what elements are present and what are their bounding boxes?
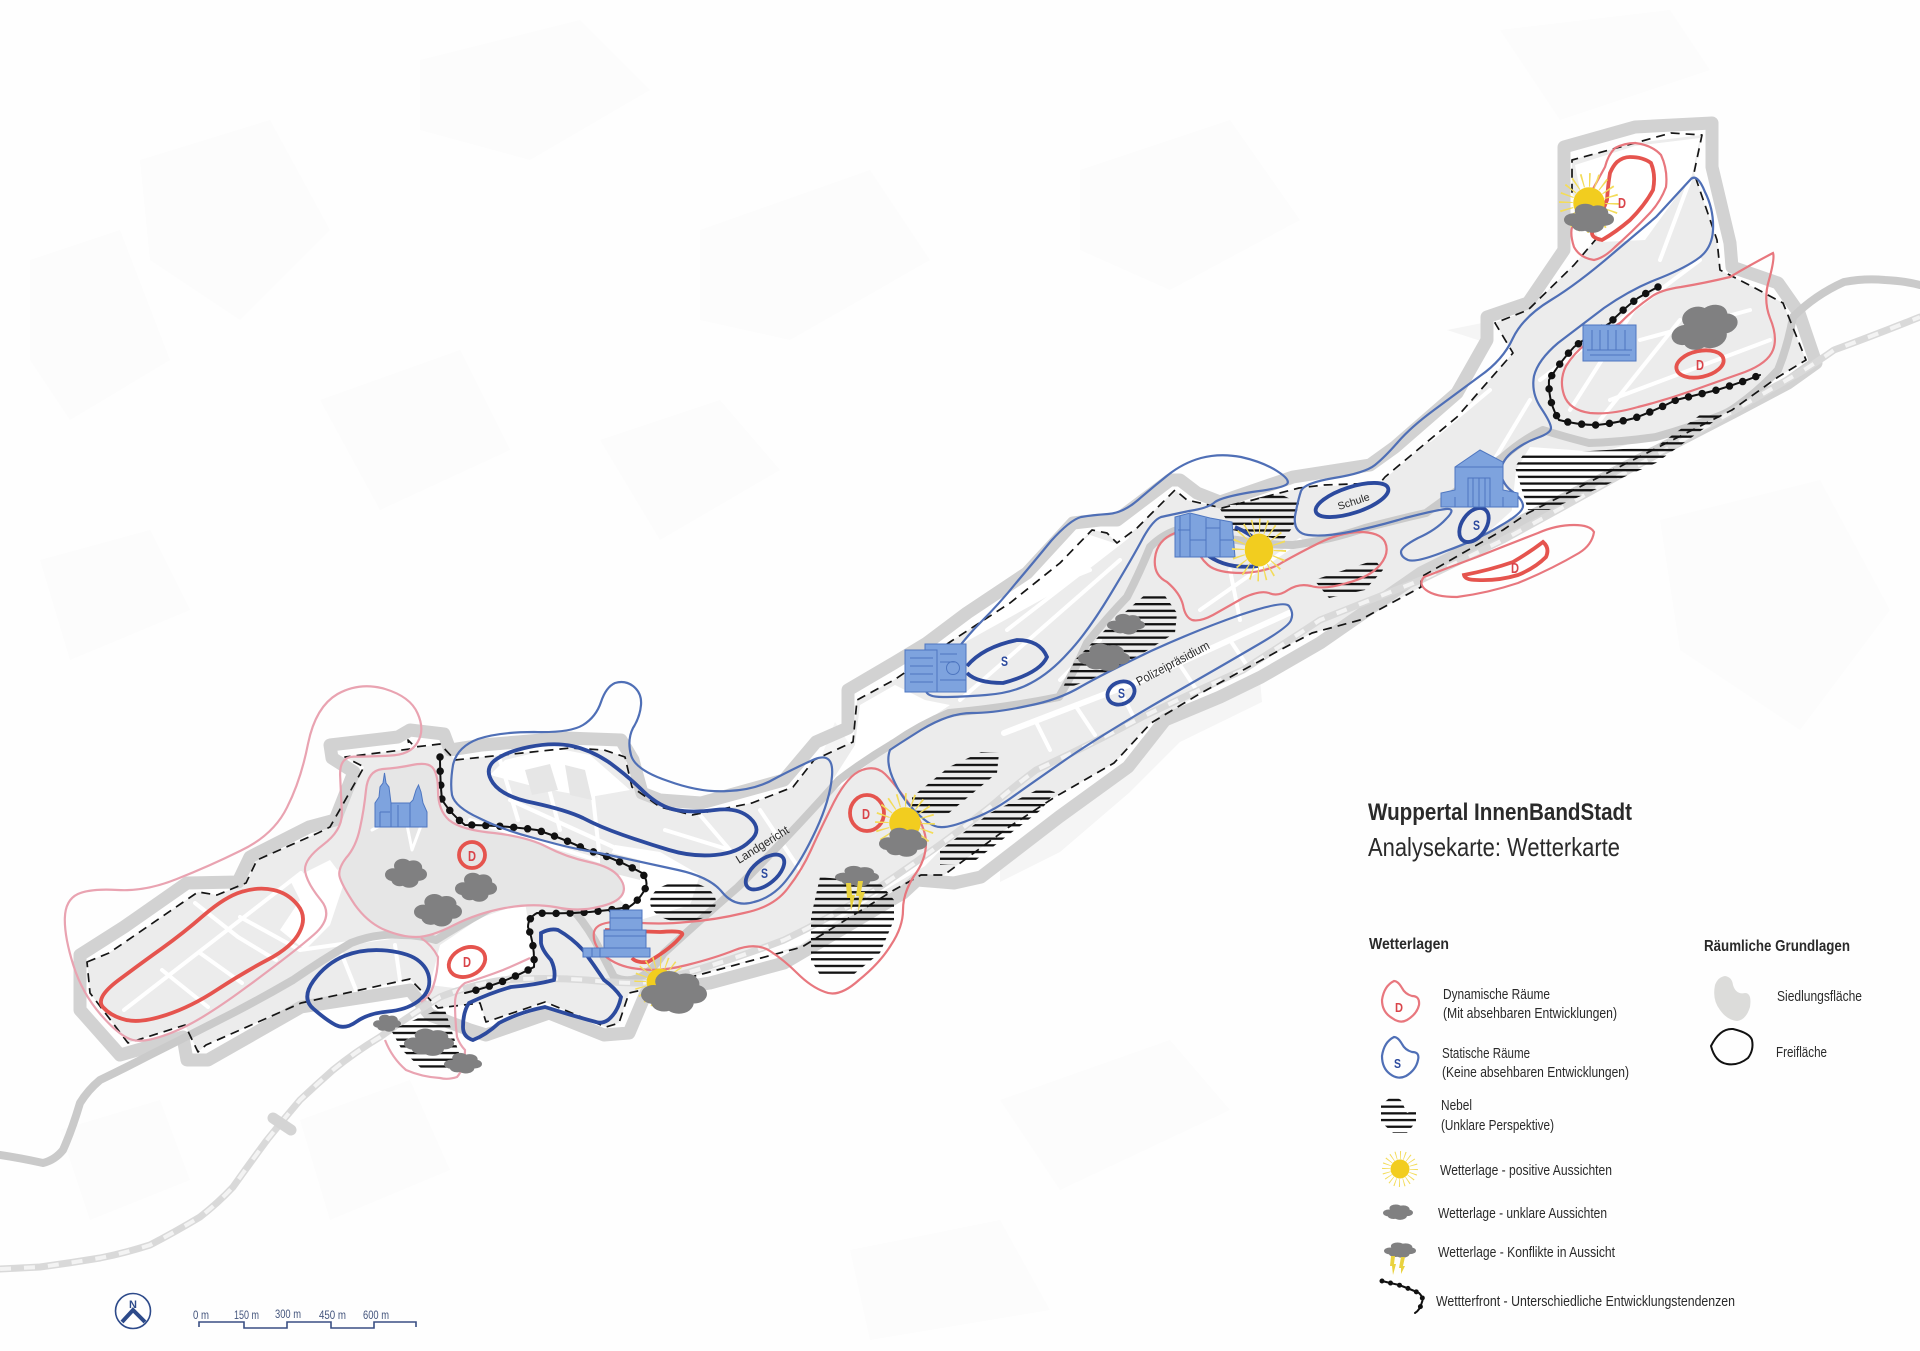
faint urban fabric south-east of the rail line (820, 322, 1487, 882)
letters D: D (463, 954, 471, 971)
scale bar (193, 1307, 416, 1328)
cloud (641, 971, 707, 1014)
red dynamic zone east, thin (1562, 253, 1775, 413)
thick blue S zone upper (967, 640, 1047, 683)
letters D (463, 195, 1704, 971)
legend: Wetterlagen (1369, 936, 1735, 1313)
central open space (Hardt) (339, 764, 624, 937)
fog: centre 2 (940, 788, 1055, 865)
legend item: dynamic spaces: Dynamische Räume (1443, 987, 1550, 1003)
open white zones (280, 138, 1738, 990)
cloud (1564, 204, 1614, 233)
building: church (375, 773, 427, 827)
letters S: S (761, 865, 768, 881)
block patches (525, 764, 640, 880)
dashed study-area boundary (87, 133, 1806, 1052)
cloud (1078, 644, 1130, 671)
red D zone east (1674, 346, 1726, 382)
legend item: positive: Wetterlage - positive Aussichten (1440, 1163, 1612, 1179)
cloud (444, 1053, 482, 1073)
scale bar: 0 m (193, 1308, 209, 1322)
red D zone centre (850, 795, 884, 831)
legend item: static spaces: S (1394, 1056, 1401, 1071)
outer grey boundary band (80, 123, 1816, 1060)
blue corridor zone Polizeipräsidium (888, 604, 1292, 827)
cloud (404, 1029, 454, 1056)
cloud (385, 859, 427, 888)
building: museum (1441, 450, 1518, 507)
legend item: open space (1711, 1029, 1827, 1064)
storm cloud (835, 866, 879, 912)
sun: north (1566, 180, 1612, 226)
legend item: fog: Nebel (1441, 1098, 1472, 1114)
blue thick arc at sun (1205, 527, 1262, 567)
building: east hall (1583, 325, 1636, 361)
red dynamic zone north, thin (1571, 143, 1666, 260)
blue large east zone (1295, 178, 1713, 561)
label Polizeipräsidium: Polizeipräsidium (1134, 638, 1212, 689)
legend item: conflicts: Wetterlage - Konflikte in Aussicht (1438, 1245, 1615, 1261)
pink dynamic zone centre (594, 768, 926, 994)
sun: Schwebebahn cloud (640, 962, 680, 1002)
thick blue static zone (307, 950, 429, 1027)
thick blue zone Elberfeld (489, 744, 756, 855)
red D zone at building (605, 930, 682, 962)
legend item: static spaces: (Keine absehbaren Entwicklungen) (1442, 1065, 1629, 1081)
thick blue zone Landgericht (740, 848, 790, 896)
legend item: dynamic spaces: (Mit absehbaren Entwicklungen) (1443, 1006, 1617, 1022)
cloud (455, 873, 497, 902)
red D zone 2 (444, 941, 490, 983)
settlement area (87, 135, 1806, 1052)
thick red zone south of rail (1464, 542, 1547, 580)
map: settlement strip (87, 135, 1806, 1052)
railway line (0, 317, 1920, 1269)
zone letters and place labels (463, 195, 1704, 971)
cloud (414, 894, 462, 927)
legend item: front: Wettterfront - Unterschiedliche Entwicklungstendenzen (1436, 1294, 1735, 1310)
letters S: S (1001, 653, 1008, 669)
weather front west (440, 757, 646, 993)
legend item: fog (1381, 1095, 1554, 1134)
legend item: front (1382, 1281, 1735, 1313)
label Schule: Schule (1336, 491, 1371, 513)
heading: Wetterlagen (1369, 936, 1449, 953)
legend item: unclear (1383, 1204, 1607, 1222)
blue upper band zone (926, 455, 1288, 697)
scale bar: 300 m (275, 1307, 301, 1321)
sun: clear (1238, 526, 1280, 574)
fog: east (1314, 560, 1383, 598)
legend item: settlement (1714, 976, 1862, 1021)
pink dynamic zone south of rail (1421, 525, 1594, 597)
cloud (879, 828, 927, 857)
thick blue S zone museum (1453, 503, 1495, 547)
legend item: conflicts (1384, 1242, 1615, 1275)
fog areas (391, 412, 1727, 1070)
fog: centre 1 (912, 752, 999, 817)
pink dynamic zone Barmen west (1155, 532, 1387, 620)
letters D: D (1618, 195, 1626, 212)
sun: behind cloud centre (882, 800, 928, 846)
river Wupper (0, 279, 1920, 1163)
building: block with sun (1175, 513, 1235, 557)
street network (124, 180, 1770, 1010)
fog: school (1219, 493, 1299, 540)
legend item: open space: Freifläche (1776, 1045, 1827, 1061)
thick red dynamic zone (101, 889, 303, 1021)
north arrow: N (129, 1299, 137, 1311)
legend item: unclear: Wetterlage - unklare Aussichten (1438, 1206, 1607, 1222)
weather front east (1549, 287, 1760, 425)
letters S: S (1473, 517, 1480, 533)
blue meander (463, 929, 621, 1040)
north arrow (116, 1294, 150, 1328)
legend item: fog: (Unklare Perspektive) (1441, 1118, 1554, 1134)
thick blue Schule zone (1312, 476, 1392, 524)
fog: rail edge (1515, 412, 1727, 510)
blue static zone Elberfeld (451, 682, 832, 904)
legend: Räumliche Grundlagen (1704, 938, 1862, 1064)
building: Opernhaus west (583, 910, 650, 957)
cloud (1666, 297, 1743, 358)
legend item: positive (1386, 1155, 1612, 1183)
fog: Ohligsmühle (650, 882, 716, 922)
legend item: settlement: Siedlungsfläche (1777, 989, 1862, 1005)
letters D: D (1696, 357, 1704, 374)
title: Wuppertal InnenBandStadt (1368, 799, 1632, 826)
letters D: D (862, 806, 870, 823)
red dynamic zone north, thick (1592, 157, 1654, 240)
letters D: D (468, 848, 476, 865)
dynamic zones west (65, 686, 429, 1041)
clouds (373, 204, 1743, 1073)
fog: storm field (811, 877, 894, 975)
thick blue S zone Polizei (1104, 677, 1138, 709)
legend item: dynamic spaces (1382, 981, 1617, 1022)
subtitle: Analysekarte: Wetterkarte (1368, 832, 1620, 862)
fog: lower left (391, 1007, 459, 1070)
scale bar: 450 m (319, 1308, 346, 1322)
legend item: dynamic spaces: D (1395, 1000, 1403, 1015)
legend item: static spaces: Statische Räume (1442, 1046, 1530, 1062)
letters S: S (1118, 685, 1125, 701)
label Landgericht: Landgericht (733, 823, 792, 867)
building: office towers (905, 644, 966, 692)
red D zone 1 (459, 842, 485, 868)
scale bar: 150 m (234, 1308, 259, 1322)
legend item: static spaces (1382, 1037, 1629, 1081)
cloud (1107, 614, 1145, 634)
pink outer dynamic zone (65, 686, 421, 1041)
cloud (373, 1015, 401, 1032)
pink lower dynamic zone (385, 938, 530, 1079)
letters S (761, 517, 1480, 881)
heading: Räumliche Grundlagen (1704, 938, 1850, 955)
fog: mid corridor (1062, 593, 1177, 690)
letters D: D (1511, 560, 1519, 577)
scale bar: 600 m (363, 1308, 389, 1322)
title block (1368, 799, 1632, 862)
